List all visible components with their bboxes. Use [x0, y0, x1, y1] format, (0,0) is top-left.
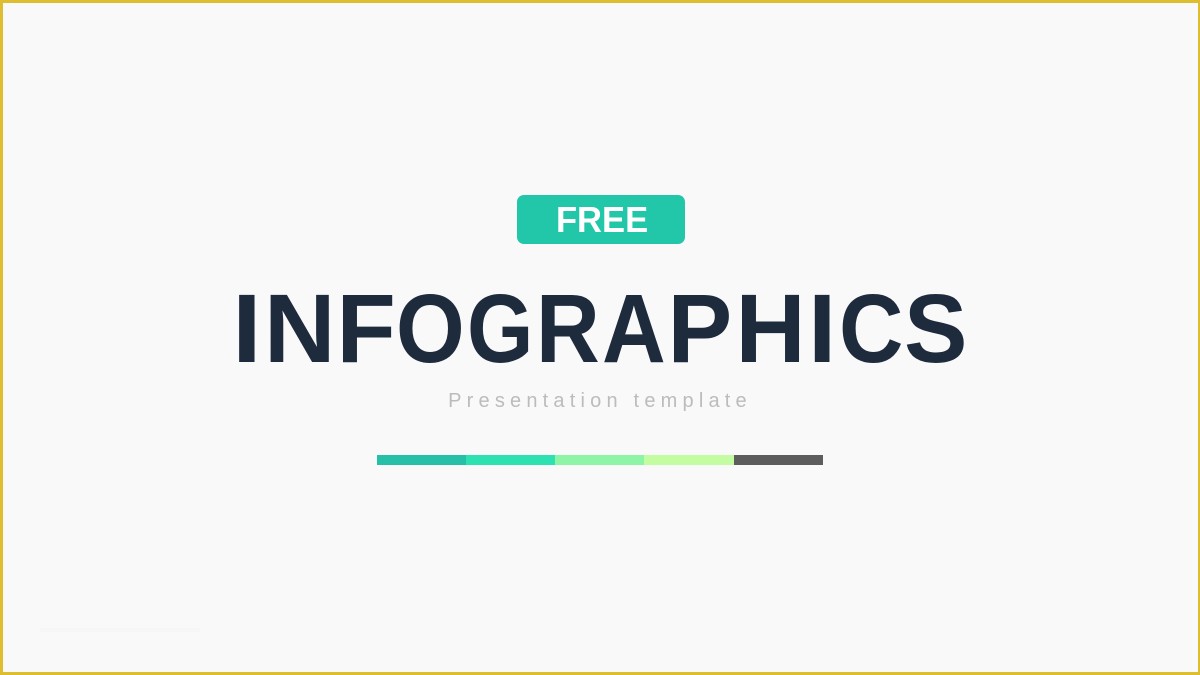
title: P	[667, 274, 732, 383]
title: O	[396, 274, 465, 383]
badge: FREE	[517, 195, 685, 244]
subtitle: Presentation template	[448, 390, 752, 412]
title: S	[904, 274, 967, 383]
title: G	[467, 274, 533, 383]
title: C	[839, 274, 903, 383]
badge label: FREE	[556, 199, 648, 240]
title: I	[808, 274, 836, 383]
colour bar	[377, 455, 823, 465]
title: F	[336, 274, 396, 383]
title	[232, 274, 967, 383]
title: I	[232, 274, 262, 383]
title: A	[602, 274, 666, 383]
faint footer mark	[40, 628, 200, 632]
title: N	[264, 274, 336, 383]
title: H	[735, 274, 806, 383]
title: R	[536, 274, 600, 383]
